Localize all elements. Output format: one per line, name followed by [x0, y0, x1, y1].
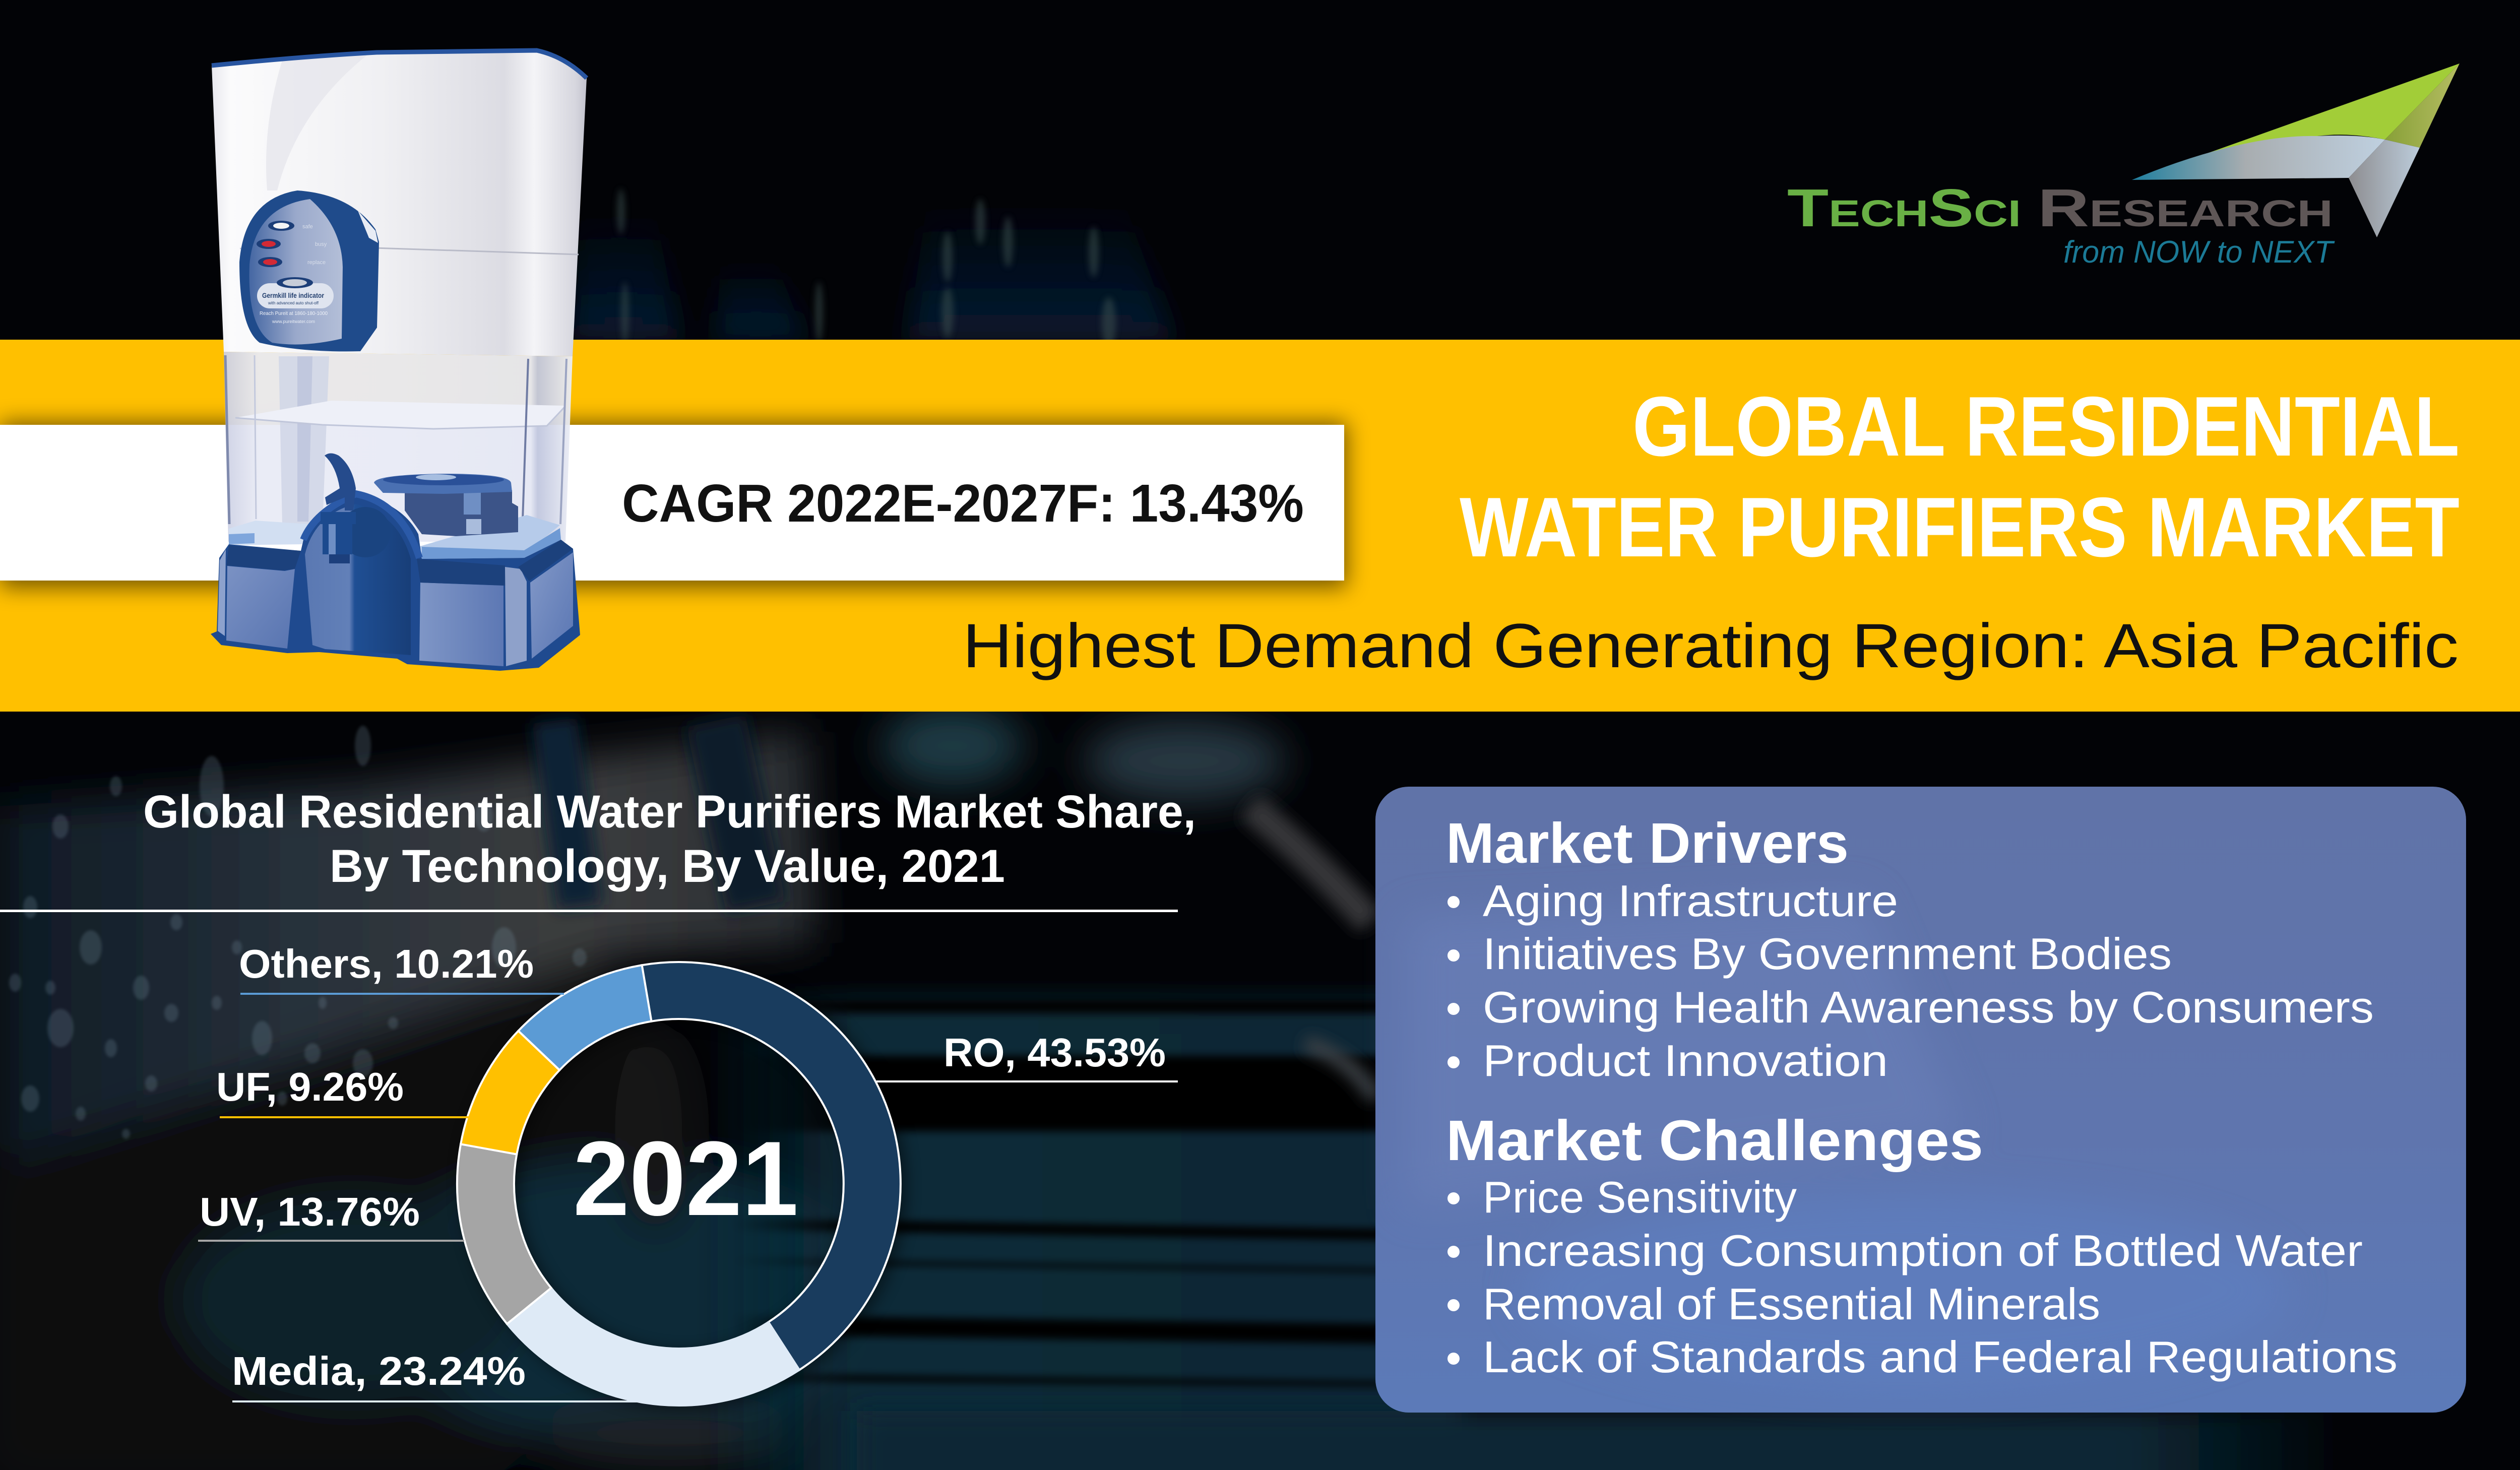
drivers list: Growing Health Awareness by Consumers	[1483, 982, 2374, 1032]
drivers list: Aging Infrastructure	[1483, 876, 1898, 926]
chart heading: Global Residential Water Purifiers Market Share,	[143, 786, 1196, 838]
main title	[1460, 379, 2460, 574]
CAGR text: CAGR 2022E-2027F: 13.43%	[622, 474, 1304, 533]
white CAGR banner	[0, 422, 1347, 588]
chart heading	[143, 786, 1196, 892]
logo tagline: from NOW to NEXT	[2063, 235, 2335, 270]
label: UF	[216, 1064, 469, 1118]
purifier indicator module: www.pureitwater.com	[272, 319, 315, 324]
label: RO: RO, 43.53%	[943, 1030, 1166, 1075]
challenges list: Lack of Standards and Federal Regulations	[1483, 1332, 2398, 1382]
base left box	[226, 566, 295, 649]
segment: Media	[507, 1288, 799, 1405]
challenges list	[1447, 1172, 2398, 1382]
heading: market challenges: Market Challenges	[1446, 1109, 1983, 1172]
donut chart	[457, 962, 901, 1405]
purifier indicator module: busy	[315, 241, 327, 247]
segment: Others	[518, 965, 651, 1070]
panel glass photo texture	[1406, 897, 2288, 1386]
purifier filter cartridge	[374, 474, 518, 536]
logo: TechSci Research	[1787, 63, 2460, 270]
challenges list: Increasing Consumption of Bottled Water	[1483, 1226, 2363, 1275]
purifier indicator module: safe	[302, 224, 313, 230]
chart heading: By Technology, By Value, 2021	[330, 841, 1005, 892]
label: UF: UF, 9.26%	[216, 1064, 404, 1109]
drivers list	[1447, 876, 2374, 1085]
subtitle: highest demand region: Highest Demand Generating Region: Asia Pacific	[963, 611, 2459, 681]
purifier indicator module: with advanced auto shut-off	[268, 301, 319, 305]
background: teal horizontal bands	[706, 1000, 2344, 1470]
challenges list: Price Sensitivity	[1483, 1172, 1797, 1222]
purifier indicator module	[239, 190, 379, 351]
yellow title band	[0, 340, 2520, 712]
logo arrow mark	[2132, 63, 2460, 237]
base right box	[419, 583, 503, 666]
purifier transparent chamber	[224, 352, 573, 559]
purifier upper tank	[212, 50, 587, 356]
logo wordmark: TECH S CI	[1787, 178, 2021, 238]
donut shadow	[490, 993, 877, 1380]
purifier indicator module: Germkill life indicator	[262, 291, 324, 299]
segment: UV	[457, 1144, 551, 1324]
label: UV	[198, 1189, 464, 1242]
logo wordmark: R ESEARCH	[2038, 178, 2333, 238]
purifier indicator module: Reach Pureit at 1860-180-1000	[260, 311, 328, 316]
segment: RO	[642, 962, 901, 1370]
segment: UF	[461, 1031, 559, 1154]
logo wordmark	[1787, 178, 2333, 238]
label: RO	[876, 1030, 1178, 1082]
label: UV: UV, 13.76%	[200, 1189, 420, 1234]
heading: market drivers: Market Drivers	[1446, 811, 1849, 875]
drivers list: Initiatives By Government Bodies	[1483, 929, 2172, 979]
label: Media	[232, 1349, 638, 1402]
challenges list: Removal of Essential Minerals	[1483, 1279, 2100, 1329]
purifier indicator module: replace	[307, 260, 326, 266]
purifier base	[211, 454, 580, 671]
donut centre year: 2021	[573, 1119, 798, 1238]
base centre column	[305, 504, 411, 655]
drivers list: Product Innovation	[1483, 1036, 1888, 1085]
label: Media: Media, 23.24%	[232, 1349, 526, 1393]
icon: water purifier	[211, 50, 587, 671]
panel: market drivers and challenges	[1375, 787, 2466, 1413]
base tap	[321, 454, 356, 563]
label: Others: Others, 10.21%	[239, 941, 534, 986]
